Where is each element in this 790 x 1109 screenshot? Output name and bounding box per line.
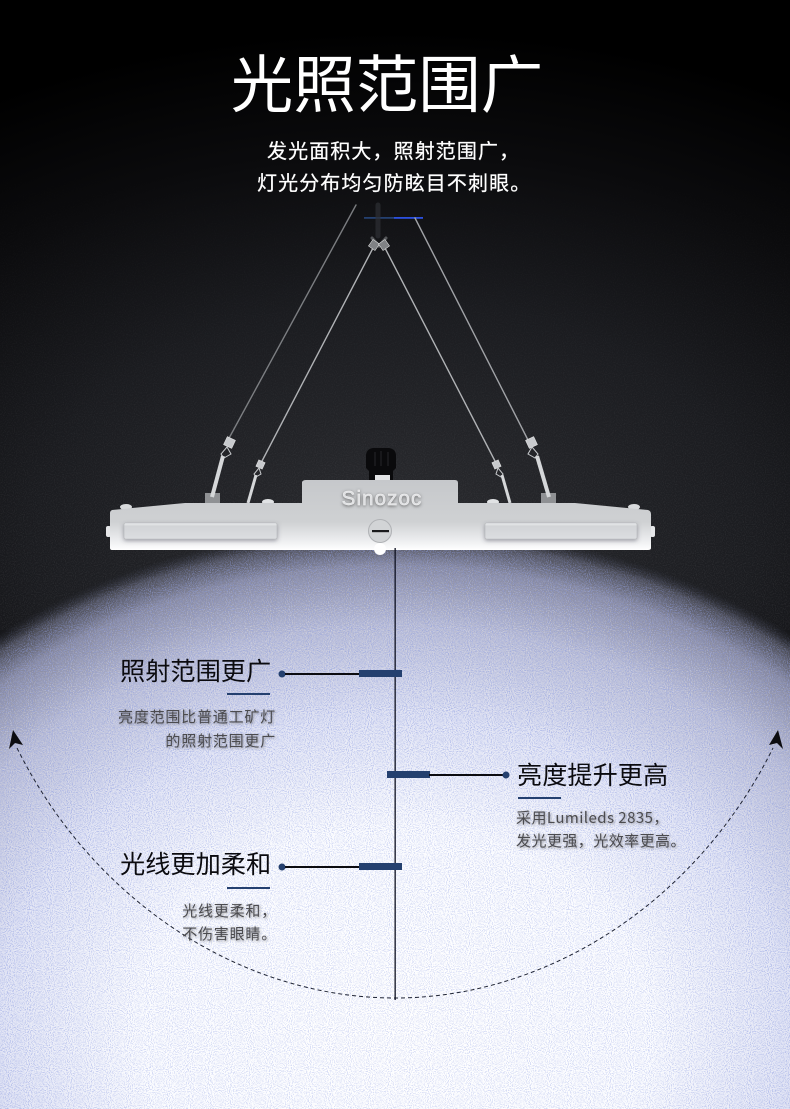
heading underline	[518, 797, 561, 799]
heading: 亮度提升更高	[517, 762, 668, 790]
description: 不伤害眼睛。	[182, 923, 277, 944]
callout: wider coverage	[118, 658, 402, 751]
background	[0, 108, 790, 647]
screw	[368, 520, 392, 542]
light pool	[0, 500, 790, 1109]
left arrowhead	[9, 730, 23, 749]
description: 亮度范围比普通工矿灯	[118, 706, 276, 727]
subtitle: 灯光分布均匀防眩目不刺眼。	[257, 172, 531, 195]
heading: 光线更加柔和	[120, 851, 271, 879]
suspension cables	[228, 205, 528, 463]
heading: 照射范围更广	[120, 658, 271, 686]
accent rule	[364, 217, 423, 219]
heading underline	[227, 887, 270, 889]
description: 的照射范围更广	[165, 730, 276, 751]
leader	[278, 863, 402, 870]
strip light left	[124, 523, 277, 539]
subtitle: 发光面积大，照射范围广，	[267, 140, 520, 163]
hanging hardware	[205, 239, 556, 504]
description: 光线更柔和，	[182, 900, 277, 921]
description: 采用Lumileds 2835，	[516, 807, 669, 828]
lamp body	[106, 480, 655, 555]
leader	[387, 771, 510, 778]
strip light right	[485, 523, 637, 539]
callout: higher brightness	[387, 762, 686, 851]
description	[182, 900, 277, 944]
right arrowhead	[769, 730, 783, 749]
title: 光照范围广	[231, 51, 543, 121]
subtitle	[257, 140, 531, 195]
leader	[278, 670, 402, 678]
description: 发光更强，光效率更高。	[516, 830, 686, 851]
brand logo: Sinozoc	[342, 487, 422, 510]
dashed arc	[9, 730, 783, 998]
central axis line	[394, 548, 396, 1000]
cable gland	[366, 448, 396, 481]
heading underline	[227, 693, 270, 695]
callout: softer light	[120, 851, 402, 944]
description	[516, 807, 686, 851]
description	[118, 706, 276, 751]
